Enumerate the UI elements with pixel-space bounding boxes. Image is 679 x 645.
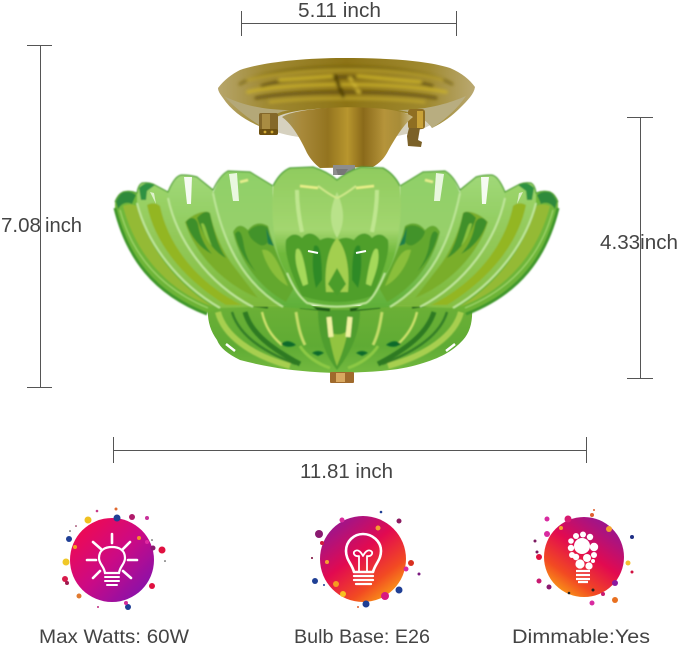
left mounting screw	[259, 113, 278, 135]
feature: max watts	[39, 508, 190, 645]
bottom brass finial	[330, 372, 354, 383]
dimension: bowl width 11.81 inch	[113, 437, 587, 483]
dimension: lamp height 4.33 inch: 4.33inch	[600, 232, 678, 254]
dimension: height 7.08 inch: 7.08	[1, 214, 41, 237]
dimension: bowl width 11.81 inch: 11.81 inch	[300, 461, 393, 483]
ceiling lamp product image	[115, 58, 558, 383]
icon: paint splatter filament bulb	[311, 511, 420, 608]
centre petal	[272, 167, 401, 307]
feature: dimmable	[512, 509, 650, 645]
dimension: lamp height 4.33 inch	[600, 117, 678, 379]
dimension: height 7.08 inch: inch	[45, 214, 82, 237]
right mounting screw and hook	[407, 109, 425, 147]
upper glass bowl with petals	[115, 167, 558, 314]
feature: bulb base	[294, 511, 430, 645]
brass cone	[282, 107, 413, 168]
dimension: top width 5.11 inch	[241, 0, 457, 36]
lower glass bowl	[208, 304, 472, 373]
brass canopy	[218, 58, 475, 175]
icon: paint splatter bulb with rays	[62, 508, 166, 610]
dimension: top width 5.11 inch: 5.11 inch	[298, 0, 381, 22]
icon: paint splatter bubble bulb	[534, 509, 634, 606]
dimension: height 7.08 inch	[1, 45, 82, 388]
